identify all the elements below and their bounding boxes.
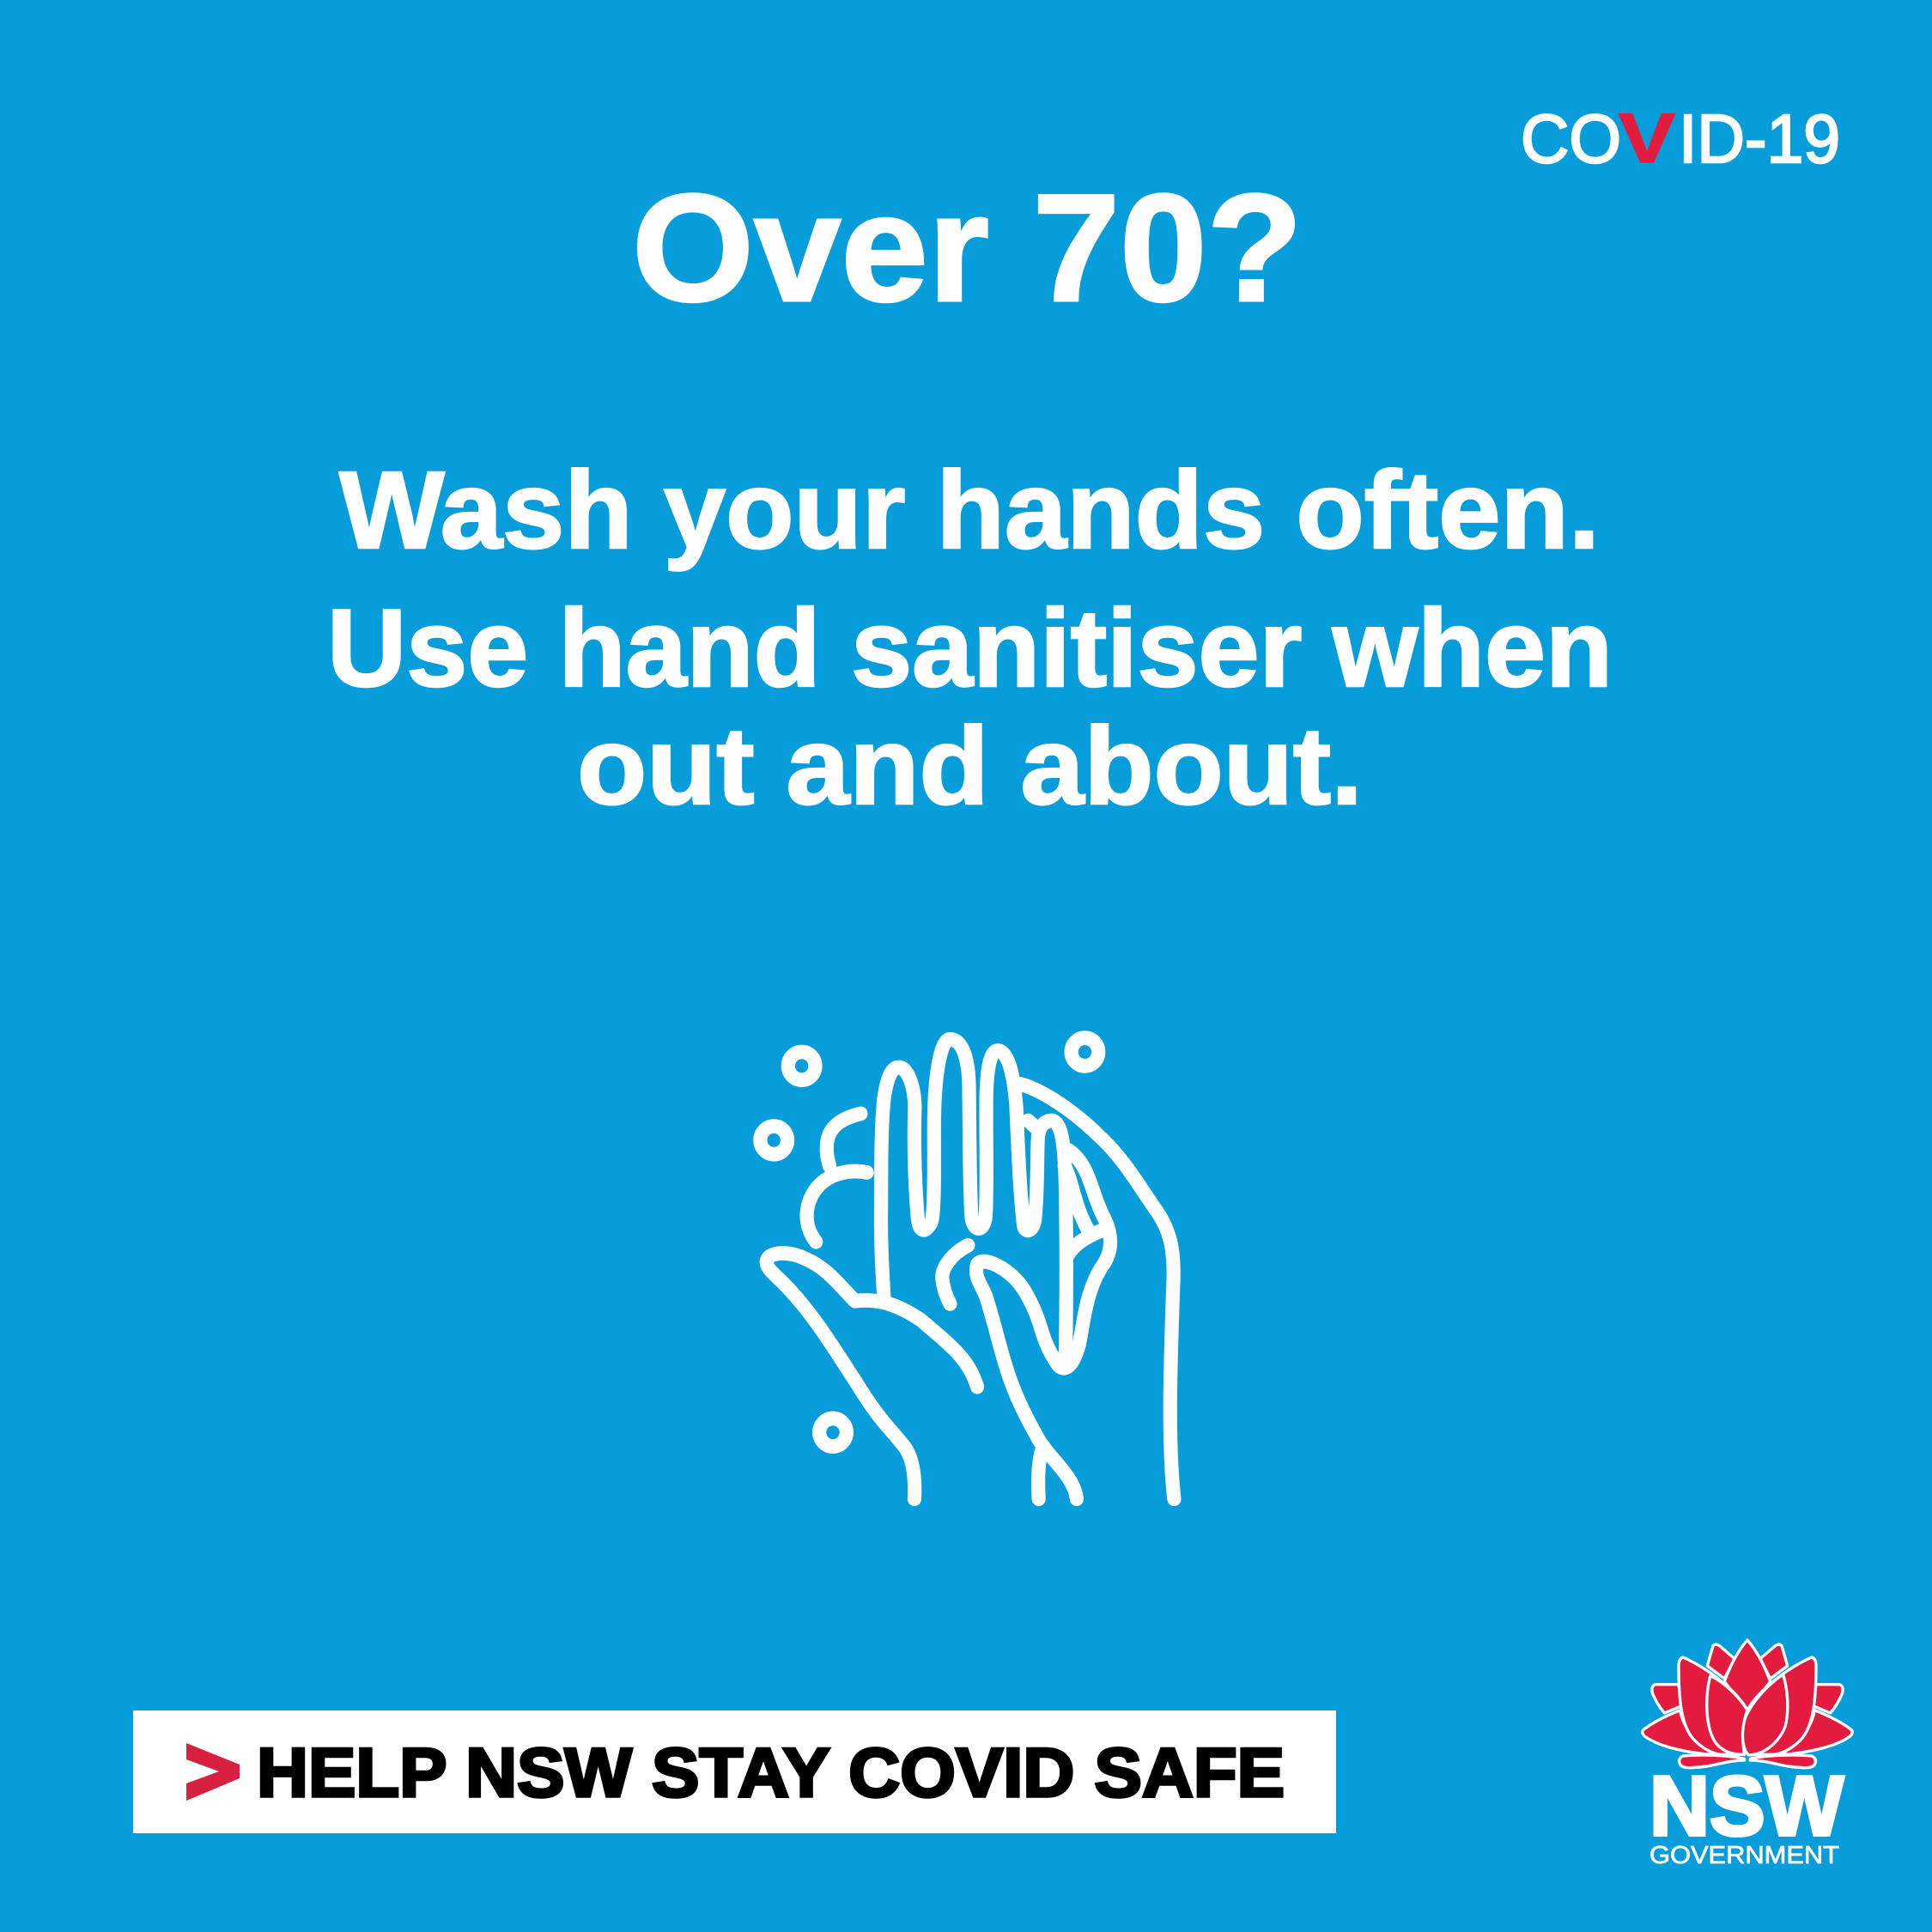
icon: waratah flower xyxy=(1643,1640,1852,1768)
text block: hand washing advice: out and about. xyxy=(577,705,1363,828)
text block: hand washing advice: Wash your hands often. xyxy=(339,449,1600,572)
logo: COVID-19 xyxy=(1521,100,1840,178)
banner text: HELP NSW STAY COVID SAFE xyxy=(257,1735,1285,1812)
Government wordmark: GOVERNMENT xyxy=(1649,1842,1839,1869)
title: Over 70? xyxy=(632,162,1303,333)
logo: COVID-19: V xyxy=(1619,100,1675,178)
logo: COVID-19: CO xyxy=(1521,100,1621,177)
banner: Help NSW stay COVID safe xyxy=(133,1710,1336,1833)
logo: COVID-19: ID-19 xyxy=(1679,100,1840,177)
icon: washing hands with soap bubbles xyxy=(760,1038,1174,1499)
logo: NSW Government waratah xyxy=(1643,1640,1852,1869)
text block: hand washing advice: Use hand sanitiser when xyxy=(327,587,1613,710)
NSW wordmark: NSW xyxy=(1649,1759,1844,1853)
icon: red chevron xyxy=(186,1743,240,1801)
text block: hand washing advice xyxy=(327,449,1613,828)
